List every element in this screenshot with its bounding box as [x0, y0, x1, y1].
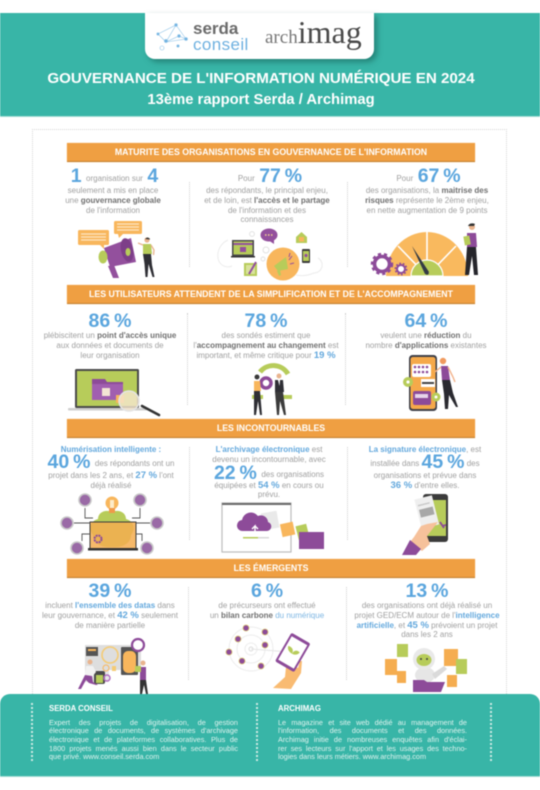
stat: 86 %: leur organisation	[80, 351, 140, 360]
stat: 6 %	[210, 580, 324, 620]
sleeve	[402, 540, 421, 555]
stat: 77 %: des répondants, le principal enjeu,	[206, 186, 328, 195]
illustration: megaphone	[78, 221, 154, 278]
footer: archimag: ARCHIMAG	[278, 704, 321, 713]
hand	[273, 661, 302, 689]
illustration: digitisation network	[61, 494, 163, 554]
stat: numérisation intelligente: projet dans les 2 ans, et 27 % l'ont	[48, 470, 174, 481]
footer: archimag: logies dans leurs métiers. www.archimag.com	[278, 752, 426, 761]
illustration: electronic archive window	[222, 503, 324, 552]
laptop	[231, 240, 255, 258]
robot body	[413, 648, 447, 683]
footer: archimag	[278, 704, 468, 762]
stat: 13 %	[354, 580, 500, 639]
footer: archimag: l'information, des documents et des données.	[278, 726, 467, 735]
stat: 1 organisation sur 4: seulement a mis en place	[68, 186, 158, 195]
stat: 1 organisation sur 4: une gouvernance globale	[65, 196, 161, 205]
stat: 78 %: important, et même critique pour 19 %	[196, 350, 336, 361]
dotted frame	[32, 129, 507, 696]
stat: 39 %: leur gouvernance, et 42 % seulement	[42, 610, 178, 621]
laptop	[88, 522, 138, 550]
illustration: carbon footprint	[226, 625, 311, 689]
footer: serda conseil: électronique de documents, de systèmes d'archivage	[49, 726, 238, 735]
stat: 64 %: nombre d'applications existantes	[365, 341, 487, 350]
stat: 86 %: aux données et documents de	[56, 341, 164, 350]
gear	[261, 378, 271, 388]
stat: 86 %: 86 %	[89, 310, 131, 332]
stat: 13 %: artificielle, et 45 % prévoient un projet	[357, 620, 497, 631]
speech bubble right	[114, 221, 142, 238]
stat: 6 %: de précurseurs ont effectué	[218, 601, 316, 610]
stat: 77 %: de l'information et des	[228, 206, 306, 215]
person right	[275, 374, 286, 415]
stat: 6 %: 6 %	[251, 580, 283, 602]
illustration: e-signature on phone	[402, 494, 448, 555]
green card	[295, 524, 310, 540]
purple speech bubble	[260, 228, 278, 244]
stat: 67 %: risques représente le 2ème enjeu,	[365, 196, 489, 205]
footer: serda conseil: que privé. www.conseil.serda.com	[49, 752, 159, 761]
stat: signature électronique: installée dans 45 % des	[370, 451, 480, 473]
gauge centre	[411, 260, 443, 276]
illustration: laptop and folder	[68, 369, 159, 415]
stat: archivage électronique: prévu.	[258, 490, 280, 499]
stat: signature électronique	[368, 445, 482, 491]
stat: numérisation intelligente: Numérisation intelligente :	[61, 445, 161, 454]
lock tag	[116, 395, 124, 403]
footer: serda conseil: Expert des projets de digitalisation, de gestion	[49, 718, 238, 726]
logo: serda conseil wordmark: conseil	[193, 34, 249, 54]
stat: 39 %	[42, 580, 178, 630]
document	[414, 495, 439, 529]
purple folder	[299, 532, 324, 549]
stat: 86 %	[44, 310, 177, 360]
footer: serda conseil: SERDA CONSEIL	[49, 704, 113, 713]
footer: archimag: rer ses lecteurs sur l'apport et les usages des techno-	[278, 744, 467, 753]
section bar: utilisateurs	[67, 285, 475, 304]
stat: 77 %: connaissances	[241, 215, 293, 224]
person with tablet	[463, 223, 478, 275]
stat: 13 %: des organisations ont déjà réalisé un	[362, 601, 492, 610]
folder	[92, 379, 123, 400]
speech bubble left	[78, 230, 109, 249]
illustration: data governance	[78, 639, 148, 694]
purple open folder	[413, 680, 445, 692]
large gear	[372, 254, 392, 274]
section bar: maturité	[67, 143, 475, 162]
phone	[302, 249, 310, 263]
stat: 39 %: incluent l'ensemble des datas dans	[45, 601, 175, 610]
person	[138, 237, 154, 277]
stat: signature électronique: 36 % d'entre elles.	[390, 480, 460, 491]
footer: archimag: Le magazine et site web dédié au management de	[278, 718, 467, 726]
footer: serda conseil: 1800 projets menés aussi bien dans le secteur public	[49, 744, 238, 753]
logo: serda conseil wordmark	[193, 19, 249, 54]
orange circle with megaphone	[266, 248, 300, 280]
stat: 67 %	[365, 165, 489, 215]
stat: archivage électronique: devenu un incontournable, avec	[212, 455, 326, 464]
stat: 77 %	[204, 165, 330, 224]
gauge needle	[412, 246, 429, 274]
stat: 13 %: projet GED/ECM autour de l'intelligence	[354, 611, 500, 620]
orange card	[280, 522, 295, 537]
logo: archimag wordmark: archimag	[265, 14, 362, 50]
illustration: sharing and access	[218, 228, 322, 280]
logo: serda conseil wordmark: serda	[193, 19, 238, 38]
stat: archivage électronique: L'archivage électronique est	[216, 445, 322, 454]
subtitle: 13ème rapport Serda / Archimag	[147, 92, 375, 108]
stat: numérisation intelligente	[47, 445, 174, 490]
person right	[135, 660, 148, 694]
icon: serda network logo	[157, 24, 188, 50]
house card	[296, 232, 307, 243]
stat: 64 %	[365, 310, 487, 350]
gear	[132, 639, 144, 651]
section bar: maturité: MATURITE DES ORGANISATIONS EN GOUVERNANCE DE L'INFORMATION	[115, 147, 427, 157]
stat: 67 %: Pour 67 %	[396, 165, 461, 187]
stat: 13 %: 13 %	[406, 580, 448, 602]
stat: 67 %: en nette augmentation de 9 points	[366, 206, 487, 215]
cloud	[237, 512, 271, 531]
illustration: AI robot	[385, 644, 467, 692]
section bar: utilisateurs: LES UTILISATEURS ATTENDENT DE LA SIMPLIFICATION ET DE L'ACCOMPAGNEMENT	[89, 289, 453, 299]
stat: 13 %: dans les 2 ans	[401, 630, 453, 639]
person	[435, 358, 458, 409]
stat: 78 %: l'accompagnement au changement est	[193, 341, 339, 350]
footer: serda conseil	[48, 704, 238, 761]
illustration: change support team	[252, 366, 292, 415]
section bar: émergents	[67, 559, 475, 578]
person left	[78, 660, 98, 689]
person left	[254, 374, 262, 415]
stat: archivage électronique: 22 % des organisations	[214, 462, 324, 484]
stat: 39 %: 39 %	[89, 580, 131, 602]
illustration: risk gauge	[372, 223, 478, 276]
stat: signature électronique: organisations et prévue dans	[374, 471, 476, 480]
stat: 77 %: Pour 77 %	[238, 165, 302, 187]
stat: 86 %: plébiscitent un point d'accès unique	[44, 331, 176, 340]
note card	[244, 262, 257, 276]
stat: 77 %: et de loin, est l'accès et le partage	[204, 196, 330, 205]
magnifier	[119, 391, 159, 415]
stat: signature électronique: La signature électronique, est	[369, 445, 481, 454]
footer: archimag: Archimag initie de nombreuses enquêtes afin d'éclai-	[278, 735, 467, 744]
section bar: incontournables	[67, 419, 475, 438]
stat: archivage électronique	[212, 445, 326, 499]
small gear	[395, 263, 407, 275]
footer band	[0, 694, 540, 777]
hand	[410, 522, 438, 551]
main title: GOUVERNANCE DE L'INFORMATION NUMÉRIQUE EN 2024	[47, 70, 475, 87]
stat: 39 %: de manière partielle	[75, 621, 145, 630]
phone	[275, 633, 311, 672]
header band	[0, 13, 540, 117]
stat: numérisation intelligente: 40 % des répondants ont un	[47, 451, 174, 473]
stat: 78 %	[193, 310, 339, 361]
light bulb	[106, 496, 118, 513]
stat: 64 %: veulent une réduction du	[380, 331, 472, 340]
notes	[385, 644, 467, 687]
footer: serda conseil: électronique et de plateformes collaboratives. Plus de	[49, 735, 238, 744]
document behind cloud	[261, 511, 279, 530]
logo card	[145, 13, 374, 59]
stat: 1 organisation sur 4: de l'information	[86, 206, 140, 215]
section bar: incontournables: LES INCONTOURNABLES	[217, 423, 325, 433]
stat: 6 %: un bilan carbone du numérique	[210, 611, 324, 620]
stat: 67 %: des organisations, la maitrise des	[366, 186, 488, 195]
megaphone body	[98, 237, 136, 278]
illustration: phone with apps	[403, 355, 458, 411]
stat: 64 %: 64 %	[405, 310, 447, 332]
stat: 78 %: 78 %	[245, 310, 287, 332]
stat: 1 organisation sur 4	[65, 165, 162, 215]
stat: 78 %: des sondés estiment que	[222, 331, 310, 340]
stat: 1 organisation sur 4: 1 organisation sur 4	[71, 165, 158, 187]
section bar: émergents: LES ÉMERGENTS	[234, 563, 308, 573]
stat: numérisation intelligente: déjà réalisé	[91, 481, 131, 490]
stat: archivage électronique: équipées et 54 % en cours ou	[214, 480, 324, 491]
